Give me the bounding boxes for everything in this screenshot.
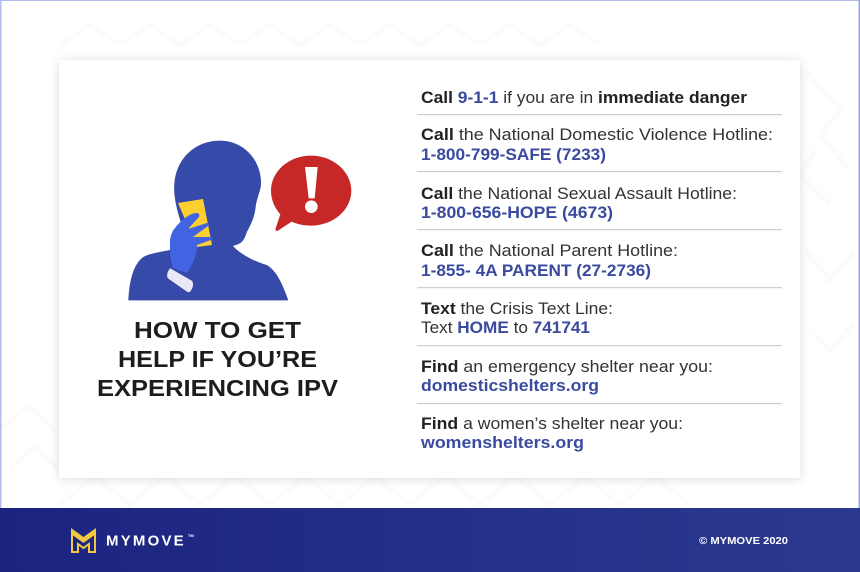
icon: person silhouette xyxy=(128,141,288,300)
text block: crisis text line: Text HOME to 741741 xyxy=(421,318,590,337)
text block: crisis text line xyxy=(421,299,613,337)
logo wordmark: MYMOVE xyxy=(106,532,186,550)
icon: shirt cuff xyxy=(167,268,193,292)
footer band xyxy=(0,508,860,572)
icon: hand xyxy=(170,213,212,273)
title: HELP IF YOU’RE xyxy=(118,346,317,372)
text block: emergency shelter: domesticshelters.org xyxy=(421,376,599,395)
title xyxy=(97,317,338,401)
text block: women's shelter: Find a women’s shelter near you: xyxy=(421,414,683,433)
illustration: person on phone xyxy=(128,141,288,300)
copyright: © MYMOVE 2020 xyxy=(699,536,788,547)
title: HOW TO GET xyxy=(134,317,302,343)
text block: emergency shelter xyxy=(421,357,713,395)
text block: sexual assault hotline: Call the National Sexual Assault Hotline: xyxy=(421,184,737,203)
text block: women's shelter xyxy=(420,414,683,452)
text block: sexual assault hotline xyxy=(421,184,737,222)
trademark mark: TM xyxy=(188,533,194,538)
text block: women's shelter: womenshelters.org xyxy=(420,433,584,452)
text block: call 911: Call 9-1-1 if you are in immediate danger xyxy=(421,88,747,107)
text block: domestic violence hotline xyxy=(421,125,773,164)
text block: parent hotline: Call the National Parent Hotline: xyxy=(421,241,678,260)
icon: yellow phone xyxy=(178,199,212,247)
text block: parent hotline xyxy=(421,241,678,280)
text block: domestic violence hotline: Call the National Domestic Violence Hotline: xyxy=(421,125,773,144)
text block: sexual assault hotline: 1-800-656-HOPE (4673) xyxy=(421,203,613,222)
text block: domestic violence hotline: 1-800-799-SAFE (7233) xyxy=(421,145,606,164)
icon: MyMove logo xyxy=(71,528,96,552)
title: EXPERIENCING IPV xyxy=(97,375,338,401)
text block: crisis text line: Text the Crisis Text Line: xyxy=(421,299,613,318)
panel: white card xyxy=(59,60,800,478)
text block: parent hotline: 1-855- 4A PARENT (27-2736) xyxy=(421,261,651,280)
text block: emergency shelter: Find an emergency shelter near you: xyxy=(421,357,713,376)
icon: red alert speech bubble xyxy=(271,156,351,231)
